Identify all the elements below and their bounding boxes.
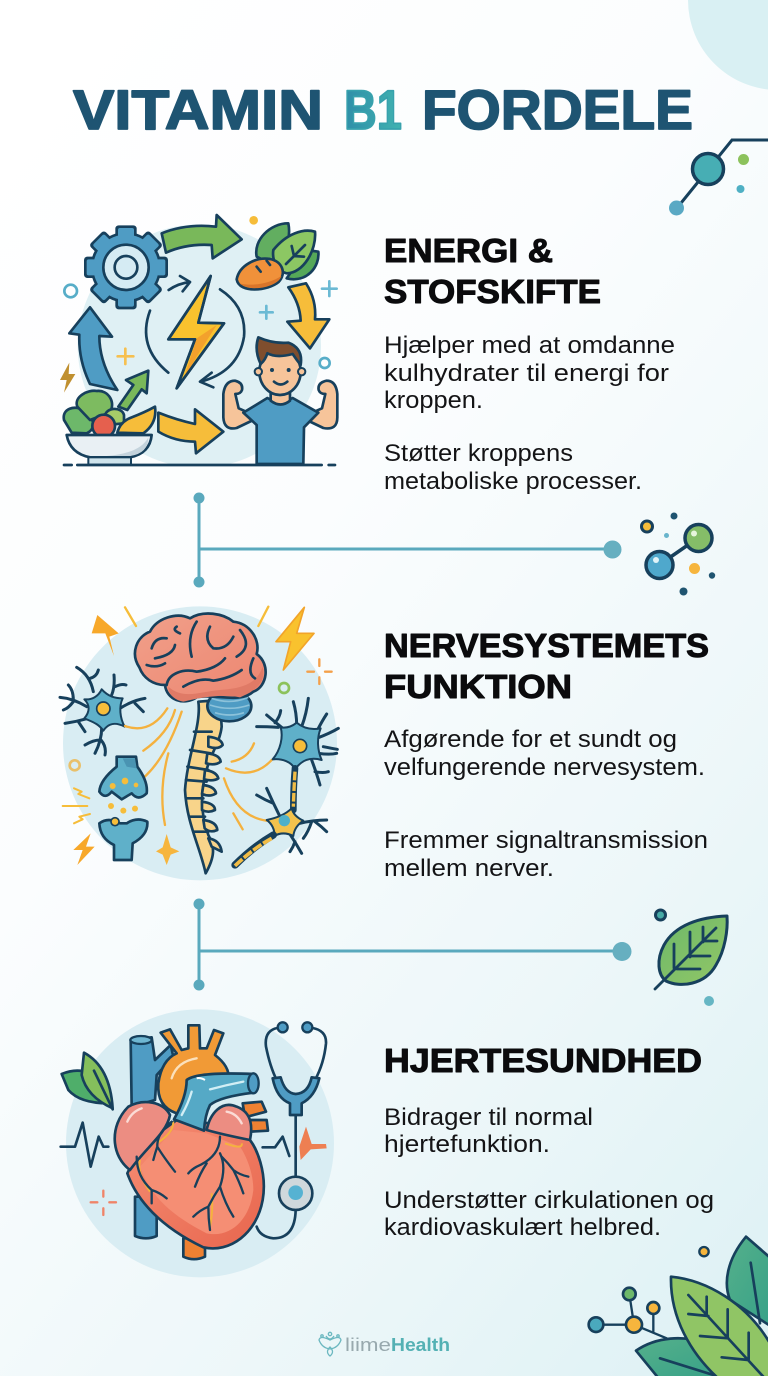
text: hjertesundhed beskrivelse: Bidrager til normal — [384, 1104, 593, 1131]
text: hjertesundhed beskrivelse: hjertefunktion. — [384, 1131, 550, 1158]
heading: energi og stofskifte — [384, 232, 601, 310]
connector 1 — [194, 492, 622, 588]
icon: salad bowl — [64, 391, 155, 465]
text: energi beskrivelse: metaboliske processer. — [384, 468, 642, 495]
title: VITAMIN — [73, 78, 323, 141]
decorative dots and plus marks — [60, 216, 337, 393]
icon: neuron left — [60, 667, 175, 755]
heading: nervesystemets funktion — [384, 627, 709, 705]
title: FORDELE — [422, 78, 693, 141]
signal lines — [134, 712, 272, 829]
icon: neuron right lower — [234, 788, 327, 867]
text: nervesystem beskrivelse: mellem nerver. — [384, 855, 554, 882]
text: energi beskrivelse: kulhydrater til energi for — [384, 360, 669, 387]
arrow: blue left — [69, 307, 117, 390]
heading: energi og stofskifte: ENERGI & — [384, 232, 553, 269]
icon: molecule top right — [669, 140, 768, 216]
heading: nervesystemets funktion: NERVESYSTEMETS — [384, 627, 709, 664]
icon: plus mark — [91, 1191, 116, 1215]
decorative corner circle — [688, 0, 768, 90]
text: nervesystem beskrivelse: velfungerende nervesystem. — [384, 754, 705, 781]
icon: spine — [185, 700, 223, 873]
icon: aorta — [158, 1025, 268, 1259]
text: nervesystem beskrivelse: Afgørende for et sundt og — [384, 726, 677, 753]
heading: nervesystemets funktion: FUNKTION — [384, 668, 572, 705]
text: nervesystem beskrivelse: Fremmer signaltransmission — [384, 827, 708, 854]
icon: cerebellum — [207, 691, 251, 721]
panel: nervesystem illustration — [60, 606, 338, 880]
text: energi beskrivelse — [384, 332, 675, 495]
text: hjertesundhed beskrivelse: Understøtter cirkulationen og — [384, 1187, 714, 1214]
logo: liimeHealth: liime — [345, 1335, 391, 1355]
logo: liimeHealth: Health — [391, 1335, 450, 1355]
icon: pulmonary artery — [174, 1073, 259, 1131]
logo: liimeHealth — [319, 1332, 450, 1356]
icon: vegetables — [237, 223, 318, 289]
panel: energi og stofskifte illustration — [60, 215, 337, 468]
text: energi beskrivelse: Støtter kroppens — [384, 440, 573, 467]
text: nervesystem beskrivelse — [384, 726, 708, 882]
title: B1 — [344, 78, 402, 141]
icon: man flexing — [223, 337, 337, 464]
icon: vena cava — [130, 1036, 173, 1238]
sparks and bolts — [63, 607, 332, 865]
icon: neuron right upper — [257, 698, 338, 810]
chart: pulse line right — [263, 1127, 327, 1160]
icon: synapse — [99, 757, 147, 860]
icon: gear — [84, 225, 168, 309]
icon: stethoscope — [257, 1022, 326, 1238]
heading: hjertesundhed: HJERTESUNDHED — [384, 1042, 702, 1079]
arrow: yellow bottom — [158, 409, 223, 453]
title — [73, 78, 693, 141]
icon: leaves and molecule bottom right — [589, 1237, 768, 1376]
icon: molecule middle — [642, 512, 715, 596]
icon: heart body — [115, 1102, 264, 1248]
heading: energi og stofskifte: STOFSKIFTE — [384, 273, 601, 310]
panel: hjertesundhed illustration — [61, 1009, 334, 1277]
arrow: green top — [162, 215, 242, 258]
icon: lightning bolt — [168, 276, 224, 388]
cycle arrows — [146, 276, 244, 387]
text: hjertesundhed beskrivelse — [384, 1104, 714, 1241]
arrow: yellow right — [287, 283, 329, 348]
arrow: green small — [118, 371, 148, 410]
text: energi beskrivelse: kroppen. — [384, 387, 483, 414]
icon: brain — [135, 614, 266, 702]
icon: leaf middle — [655, 910, 727, 1006]
chart: pulse line left — [61, 1123, 108, 1167]
connector 2 — [194, 898, 632, 990]
icon: logo mark — [319, 1332, 341, 1356]
text: energi beskrivelse: Hjælper med at omdanne — [384, 332, 675, 359]
icon: leaf — [62, 1053, 113, 1109]
text: hjertesundhed beskrivelse: kardiovaskulært helbred. — [384, 1214, 661, 1241]
ground line — [64, 461, 335, 469]
